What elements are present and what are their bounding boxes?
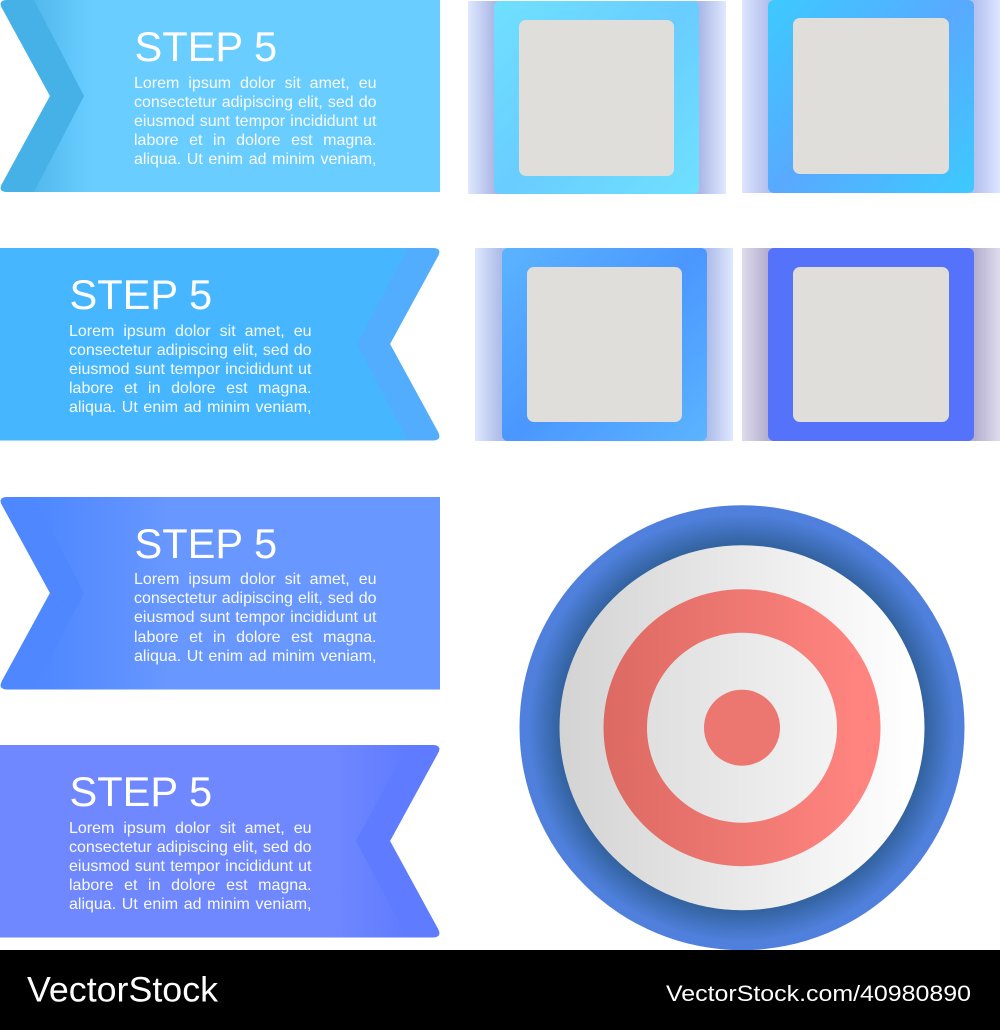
panel: step 5 fourth ribbon [0,745,440,938]
panel: step 5 third ribbon: STEP 5 [134,520,277,567]
panel: step 5 second ribbon [0,248,440,440]
footer: watermark bar [0,950,1000,1030]
panel: step 5 third ribbon: labore et in dolore est magna. [134,629,376,646]
panel: step 5 third ribbon: eiusmod sunt tempor incididunt ut [134,609,376,626]
panel: step 5 top-left ribbon: labore et in dolore est magna. [134,132,376,149]
panel: step 5 top-left ribbon [0,0,440,192]
panel: step 5 second ribbon: consectetur adipiscing elit, sed do [69,342,312,359]
panel: step 5 second ribbon: STEP 5 [70,271,212,318]
panel: step 5 second ribbon: labore et in dolore est magna. [69,380,312,397]
image placeholder: mid blue square [475,248,733,440]
brand name: VectorStock [27,970,218,1010]
panel: step 5 third ribbon: consectetur adipiscing elit, sed do [134,590,376,607]
image placeholder: cyan square [468,1,726,194]
panel: step 5 fourth ribbon: labore et in dolore est magna. [69,877,312,894]
image placeholder: indigo square [742,248,1000,440]
panel: step 5 fourth ribbon: Lorem ipsum dolor sit amet, eu [69,820,312,836]
panel: step 5 top-left ribbon: STEP 5 [134,23,277,70]
panel: step 5 top-left ribbon: consectetur adipiscing elit, sed do [134,94,376,111]
panel: step 5 third ribbon: aliqua. Ut enim ad minim veniam, [134,648,376,665]
icon: target [520,505,964,950]
panel: step 5 second ribbon: aliqua. Ut enim ad minim veniam, [69,399,312,416]
image url: VectorStock.com/40980890 [666,981,971,1006]
panel: step 5 fourth ribbon: eiusmod sunt tempor incididunt ut [69,858,312,875]
image placeholder: sky blue square [742,0,1000,192]
panel: step 5 top-left ribbon: eiusmod sunt tempor incididunt ut [134,113,376,130]
panel: step 5 third ribbon: Lorem ipsum dolor sit amet, eu [134,571,376,588]
panel: step 5 fourth ribbon: consectetur adipiscing elit, sed do [69,839,312,856]
panel: step 5 top-left ribbon: Lorem ipsum dolor sit amet, eu [134,74,376,92]
panel: step 5 top-left ribbon: aliqua. Ut enim ad minim veniam, [134,151,376,168]
panel: step 5 third ribbon [0,497,440,690]
panel: step 5 fourth ribbon: STEP 5 [70,768,212,815]
panel: step 5 second ribbon: Lorem ipsum dolor sit amet, eu [69,322,312,340]
panel: step 5 fourth ribbon: aliqua. Ut enim ad minim veniam, [69,896,312,913]
panel: step 5 second ribbon: eiusmod sunt tempor incididunt ut [69,361,312,378]
